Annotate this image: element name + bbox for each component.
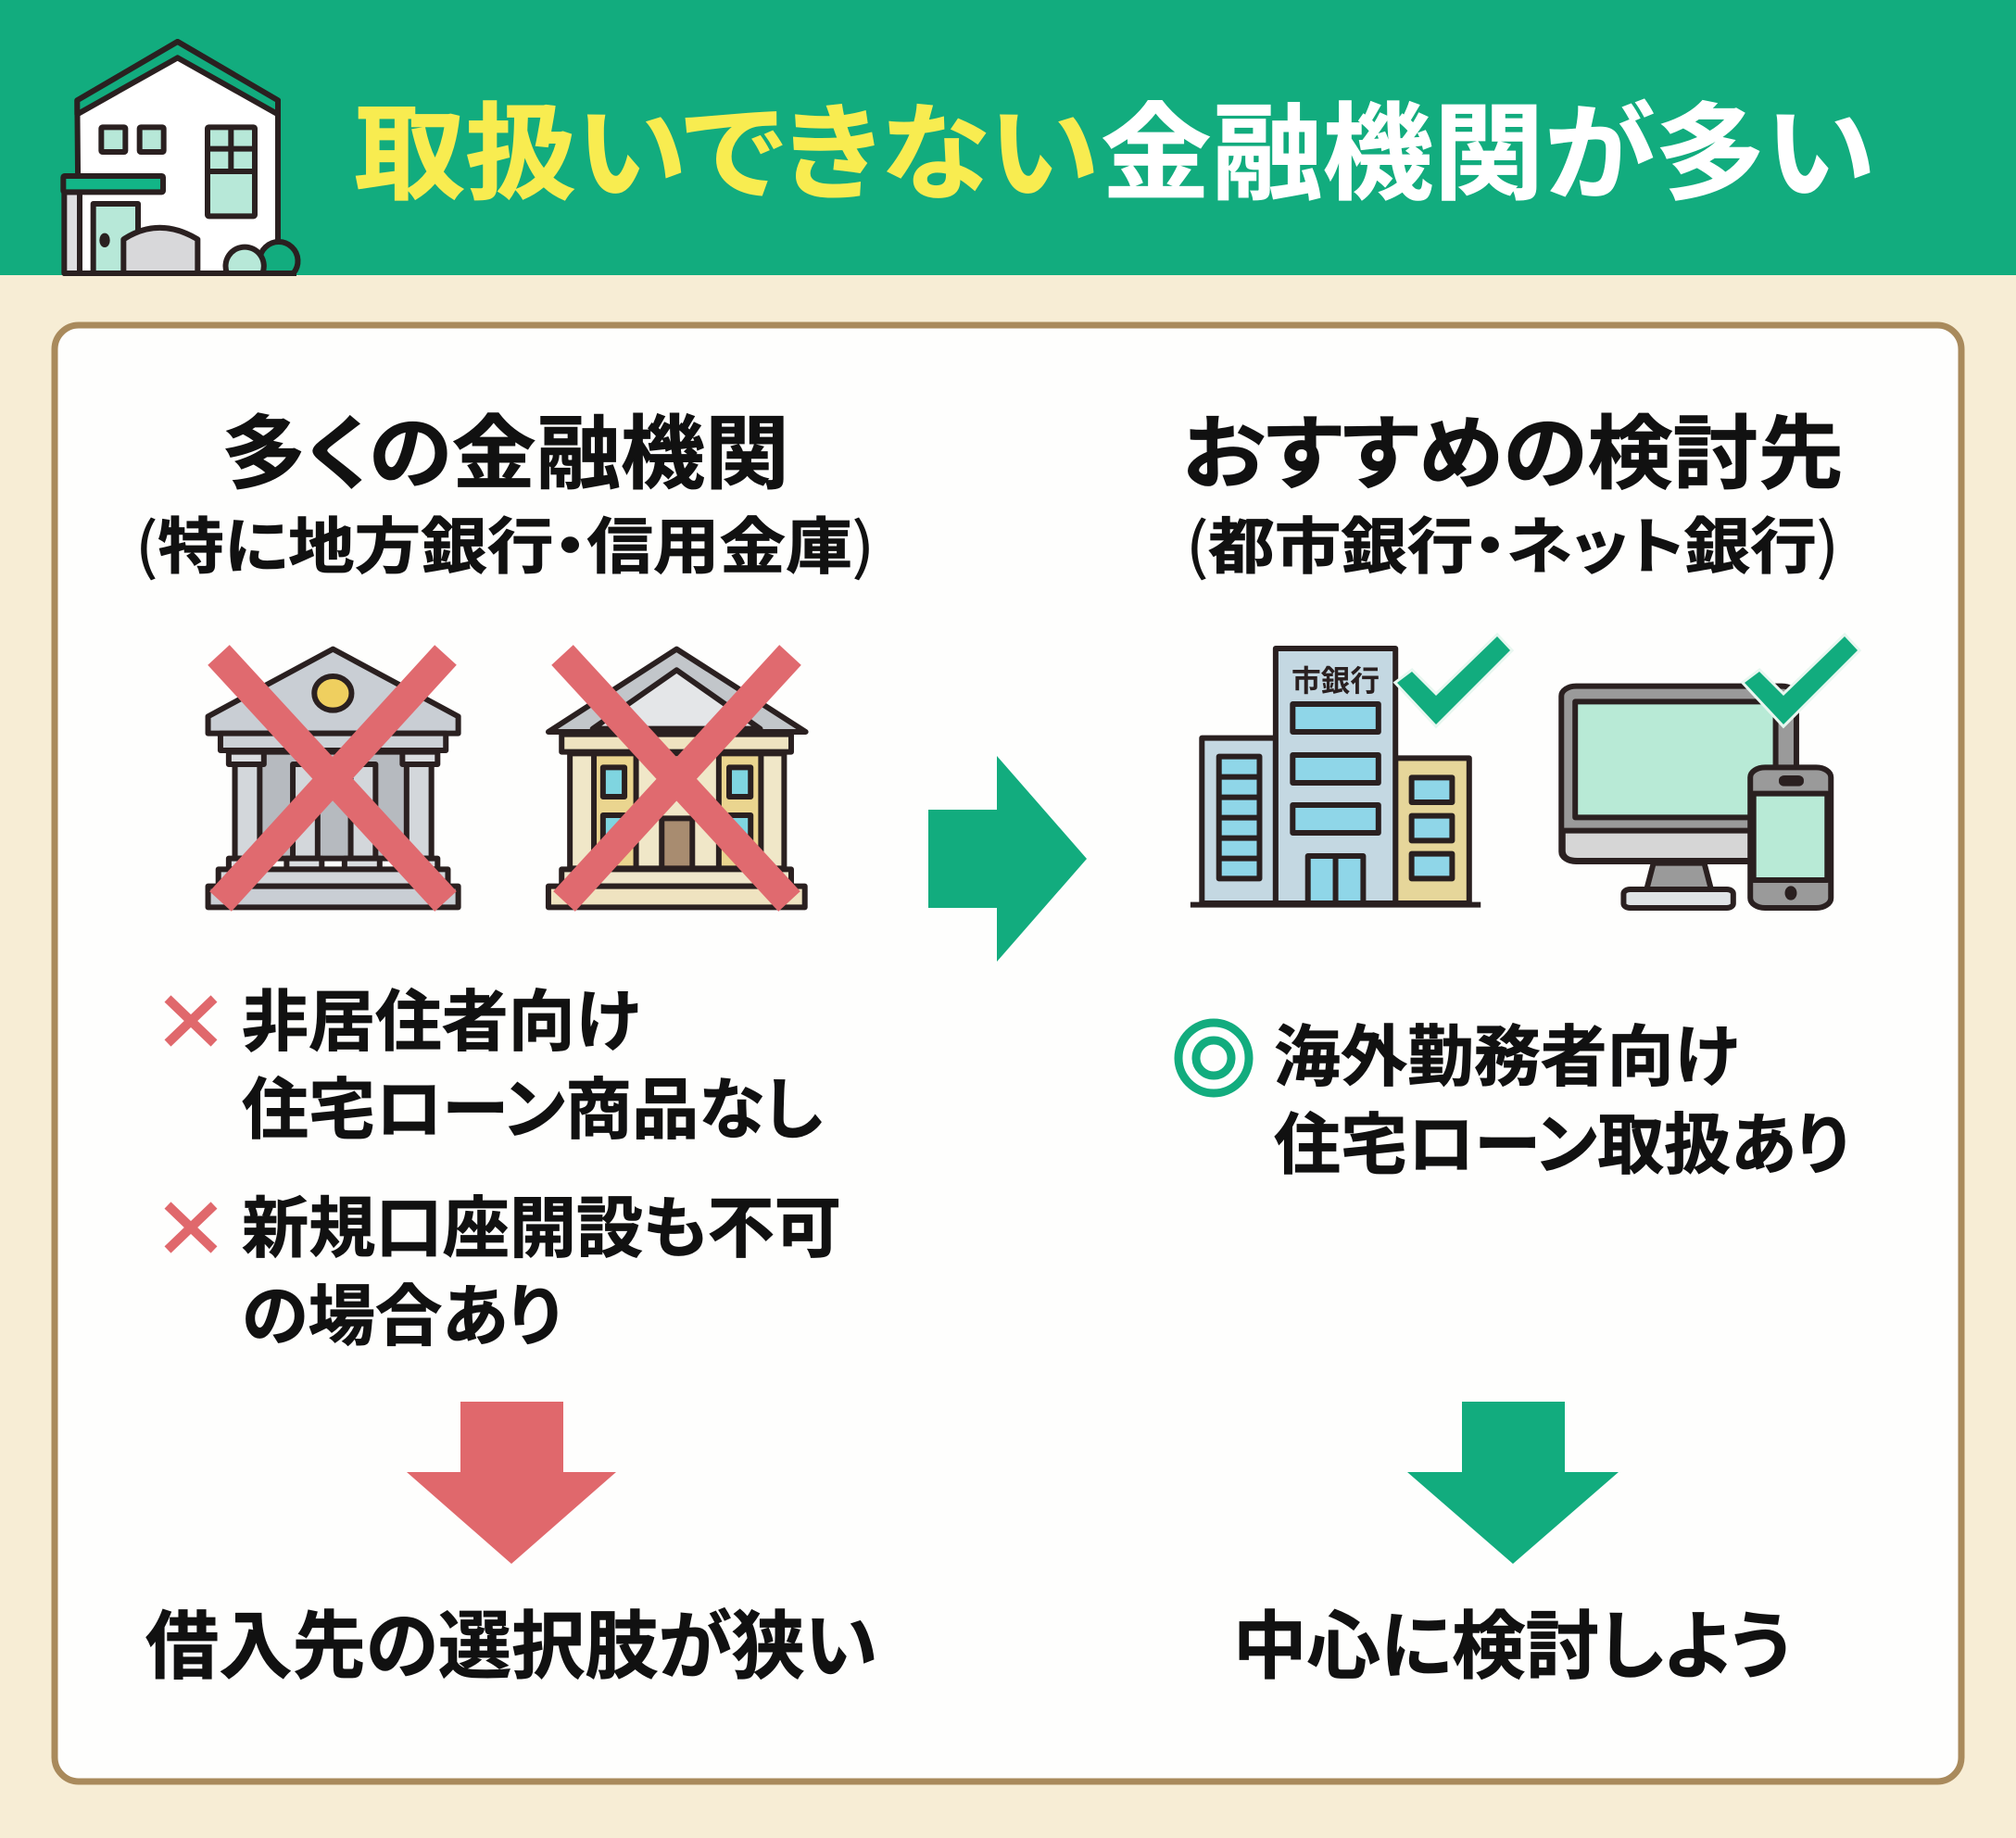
bullet: no new account: 新規口座開設も不可 (242, 1192, 841, 1266)
bullet: overseas worker loan (1178, 1021, 1849, 1183)
arrow: red down (407, 1402, 616, 1564)
arrow: center right (928, 756, 1087, 962)
icon: monitor and smartphone (1561, 636, 1858, 908)
panel: left column (135, 409, 877, 1688)
icon: green check (1397, 636, 1510, 724)
title (354, 96, 1875, 214)
heading: many institutions: (特に地方銀行・信用金庫 ) (135, 497, 875, 586)
conclusion: left: 借入先の選択肢が狭い (145, 1605, 877, 1688)
icon: city bank buildings (1191, 636, 1510, 905)
arrow: green down (1407, 1402, 1619, 1564)
icon: green check (1745, 636, 1858, 724)
bullet: overseas worker loan: 海外勤務者向け (1274, 1021, 1738, 1095)
title: 取扱いできない (354, 96, 1099, 214)
panel: right column (1178, 409, 1858, 1688)
icon: crossed-out bank 1 (208, 649, 459, 907)
bullet: no new account: の場合あり (242, 1280, 561, 1354)
icon: x mark (168, 999, 214, 1043)
bullet: no non-resident loan: 住宅ローン商品なし (242, 1074, 823, 1148)
bullet: no non-resident loan: 非居住者向け (242, 986, 639, 1060)
heading: recommended: (都市銀行・ネット銀行 ) (1186, 497, 1839, 586)
heading: many institutions: 多くの金融機関 (221, 409, 789, 499)
header band (0, 0, 2016, 275)
icon: x mark (168, 1205, 214, 1250)
heading: many institutions (135, 409, 875, 586)
main panel (55, 325, 1961, 1781)
bullet: overseas worker loan: 住宅ローン取扱あり (1274, 1109, 1849, 1183)
heading: recommended: おすすめの検討先 (1182, 409, 1844, 499)
title: 金融機関が多い (1101, 96, 1875, 214)
conclusion: right: 中心に検討しよう (1233, 1605, 1791, 1688)
bullet: no new account (168, 1192, 841, 1354)
icon: double circle (1178, 1023, 1249, 1093)
icon: crossed-out bank 2 (548, 649, 806, 907)
icon: house (63, 42, 297, 273)
heading: recommended (1182, 409, 1844, 586)
icon: city bank buildings: 市銀行 (1292, 664, 1380, 698)
bullet: no non-resident loan (168, 986, 823, 1148)
